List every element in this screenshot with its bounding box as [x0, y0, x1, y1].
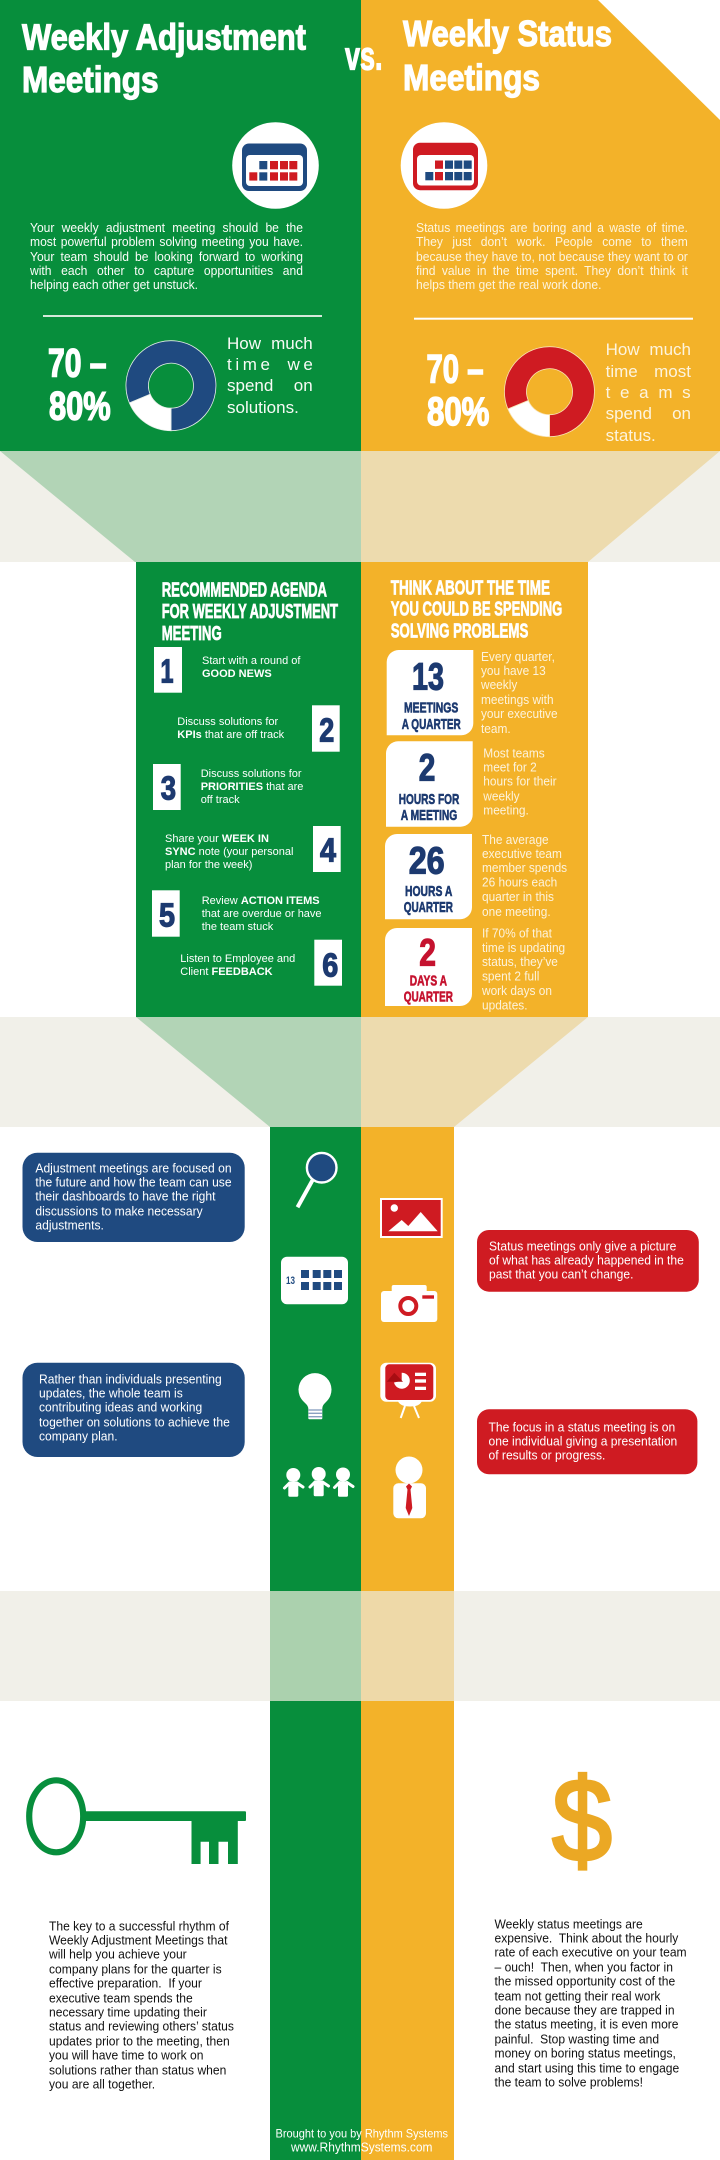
stat: 70 to 80 percent adjustment: 80%	[49, 384, 111, 428]
agenda item 2: KPIs that are off track	[177, 729, 284, 741]
description: 2 hours: Most teams	[483, 746, 545, 760]
card: 13 meetings a quarter: MEETINGS	[404, 700, 458, 717]
card: 2 hours for a meeting: 2	[419, 748, 435, 790]
description: 26 hours: 26 hours each	[482, 875, 557, 890]
description: 26 hours: one meeting.	[482, 905, 551, 919]
description: 13 meetings: you have 13	[481, 664, 546, 678]
callout: status meetings picture of the past: Status meetings only give a picture	[489, 1239, 676, 1254]
versus label: vs.	[345, 34, 382, 78]
text block: how much time we spend on solutions: solutions.	[227, 398, 299, 417]
agenda item 3	[153, 764, 303, 810]
agenda item 5	[152, 890, 322, 937]
description: 2 days: updates.	[482, 998, 528, 1013]
callout: adjustment meetings focus on future: their dashboards to have the right	[35, 1189, 216, 1204]
text block: status meeting intro: Status meetings are boring and a waste of time.	[416, 220, 688, 235]
text block: status meeting intro: helps them get the real work done.	[416, 277, 601, 292]
card: 2 days a quarter: 2	[419, 932, 436, 974]
description: 2 days: work days on	[481, 984, 552, 998]
card: 2 days a quarter: QUARTER	[404, 989, 453, 1006]
text block: adjustment meeting intro: helping each other get unstuck.	[30, 277, 198, 292]
text block: status meeting intro: find value in the time spent. They don’t think it	[416, 263, 688, 278]
icon: calendar with 13 weeks	[281, 1257, 348, 1304]
description: 2 hours: meet for 2	[483, 760, 537, 775]
description: 13 meetings: weekly	[480, 678, 518, 692]
agenda item 5: 5	[159, 897, 175, 934]
stat: 70 to 80 percent adjustment: 70 –	[48, 342, 106, 386]
card: 13 meetings a quarter	[387, 650, 473, 735]
description: 26 hours: member spends	[482, 861, 567, 875]
description: 13 meetings: meetings with	[481, 693, 554, 707]
text block: key to successful adjustment meetings: The key to a successful rhythm of	[49, 1919, 229, 1934]
text block: adjustment meeting intro: Your team should be looking forward to working	[30, 249, 303, 264]
description: 2 days: spent 2 full	[482, 969, 539, 984]
panel: top adjustment meetings background	[0, 0, 361, 451]
text block: key to successful adjustment meetings: status and reviewing others’ status	[49, 2019, 234, 2034]
icon: presentation board	[380, 1363, 436, 1418]
callout: status meetings picture of the past: past that you can’t change.	[489, 1267, 633, 1282]
callout: whole team contributes: updates, the whole team is	[39, 1386, 183, 1401]
heading: recommended agenda	[162, 579, 338, 645]
callout: focus on one individual: The focus in a status meeting is on	[488, 1420, 675, 1435]
card: 13 meetings a quarter: A QUARTER	[402, 716, 461, 733]
agenda item 1: 1	[160, 653, 174, 690]
icon: person with tie	[393, 1456, 426, 1518]
agenda item 2	[177, 705, 340, 752]
text block: status meetings are expensive: – ouch! Then, when you factor in	[494, 1960, 673, 1975]
callout: adjustment meetings focus on future: discussions to make necessary	[35, 1204, 203, 1219]
text block: status meetings are expensive: rate of each executive on your team	[494, 1945, 687, 1960]
central comparison strip	[270, 1127, 454, 2160]
card: 2 hours for a meeting: HOURS FOR	[399, 791, 459, 808]
callout: adjustment meetings focus on future	[22, 1153, 245, 1242]
heading: recommended agenda: MEETING	[162, 622, 222, 645]
callout: status meetings picture of the past	[477, 1230, 699, 1292]
chart: blue donut	[126, 341, 216, 431]
title: weekly adjustment meetings	[22, 16, 306, 100]
text block: how much time most teams spend on status: spend on	[606, 404, 691, 423]
callout: whole team contributes: contributing ideas and working	[39, 1400, 202, 1415]
text block: how much time we spend on solutions: time we	[227, 355, 316, 374]
description: 2 days: status, they’ve	[482, 955, 558, 969]
card: 2 hours for a meeting: A MEETING	[401, 807, 457, 824]
card: 2 days a quarter: DAYS A	[410, 973, 447, 990]
footer credit	[276, 2127, 448, 2154]
agenda item 1: GOOD NEWS	[202, 668, 272, 680]
text block: status meetings are expensive: the missed opportunity cost of the	[494, 1974, 675, 1989]
callout: status meetings picture of the past: of what has already happened in the	[489, 1253, 684, 1268]
text block: status meetings are expensive: team not getting their real work	[494, 1989, 661, 2004]
agenda item 6: Client FEEDBACK	[180, 966, 273, 978]
agenda item 4	[165, 826, 341, 872]
text block: key to successful adjustment meetings: necessary time updating their	[49, 2005, 207, 2020]
callout: adjustment meetings focus on future: adjustments.	[35, 1218, 104, 1233]
text block: status meetings are expensive: done because they are trapped in	[494, 2003, 675, 2018]
icon: red calendar in circle	[401, 122, 487, 209]
icon: blue calendar in circle	[232, 122, 319, 209]
agenda item 3: Discuss solutions for	[201, 768, 302, 780]
agenda item 2: Discuss solutions for	[177, 716, 279, 728]
heading: recommended agenda: RECOMMENDED AGENDA	[162, 579, 327, 602]
text block: status meetings are expensive: money on boring status meetings,	[494, 2046, 676, 2061]
heading: think about the time: THINK ABOUT THE TIME	[391, 577, 550, 600]
text block: key to successful adjustment meetings: effective preparation. If your	[49, 1976, 202, 1991]
footer credit: www.RhythmSystems.com	[290, 2139, 432, 2154]
text block: status meetings are expensive: painful. Stop wasting time and	[494, 2032, 659, 2047]
title: weekly adjustment meetings: Weekly Adjustment	[22, 16, 306, 57]
callout: focus on one individual: of results or progress.	[488, 1448, 605, 1463]
description: 2 hours: weekly	[482, 789, 520, 804]
stat: 70 to 80 percent status: 80%	[427, 390, 489, 434]
callout: whole team contributes: company plan.	[39, 1429, 118, 1444]
callout: adjustment meetings focus on future: Adjustment meetings are focused on	[35, 1161, 232, 1176]
description: 2 days: time is updating	[482, 941, 565, 955]
panel: think about the time	[361, 562, 588, 1017]
callout: whole team contributes	[22, 1363, 245, 1457]
agenda item 5: that are overdue or have	[202, 908, 322, 920]
card: 13 meetings a quarter: 13	[412, 656, 444, 698]
card: 2 hours for a meeting	[386, 741, 473, 827]
description: 26 hours: quarter in this	[482, 890, 554, 904]
description: 26 hours: executive team	[482, 847, 562, 861]
stat: 70 to 80 percent adjustment	[48, 342, 111, 428]
title: weekly adjustment meetings: Meetings	[22, 59, 158, 100]
stat: 70 to 80 percent status: 70 –	[426, 348, 484, 392]
text block: status meetings are expensive: and start using this time to engage	[494, 2061, 679, 2076]
callout: whole team contributes: Rather than individuals presenting	[39, 1372, 222, 1387]
card: 26 hours a quarter: HOURS A	[405, 883, 452, 900]
card: 26 hours a quarter	[385, 834, 472, 919]
description: 26 hours: The average	[482, 833, 549, 847]
agenda item 3: off track	[201, 794, 240, 806]
text block: adjustment meeting intro: Your weekly adjustment meeting should be the	[30, 220, 303, 235]
text block: key to successful adjustment meetings: you are all together.	[49, 2077, 155, 2092]
card: 26 hours a quarter: 26	[409, 840, 445, 882]
text block: key to successful adjustment meetings: Weekly Adjustment Meetings that	[49, 1933, 228, 1948]
description: 2 days: If 70% of that	[482, 926, 553, 941]
title: weekly status meetings	[403, 13, 612, 98]
description: 13 meetings: team.	[481, 722, 511, 736]
text block: how much time most teams spend on status: How much	[606, 340, 691, 359]
title: weekly status meetings: Meetings	[403, 57, 540, 98]
icon: picture	[380, 1198, 443, 1238]
callout: focus on one individual	[477, 1409, 697, 1474]
callout: focus on one individual: one individual giving a presentation	[488, 1434, 677, 1449]
agenda item 4: Share your WEEK IN	[165, 833, 269, 845]
text block: how much time we spend on solutions	[227, 334, 316, 417]
agenda item 1	[154, 647, 301, 693]
agenda item 3: PRIORITIES that are	[201, 781, 303, 793]
callout: whole team contributes: together on solutions to achieve the	[39, 1415, 230, 1430]
text block: adjustment meeting intro	[30, 220, 303, 292]
agenda item 6: 6	[322, 946, 338, 983]
icon: magnifying glass	[298, 1153, 337, 1206]
icon: calendar with 13 weeks: 13	[286, 1275, 295, 1287]
text block: key to successful adjustment meetings: company plans for the quarter is	[49, 1962, 222, 1977]
text block: status meeting intro: They just don’t work. People come to them	[416, 234, 688, 249]
description: 2 hours: meeting.	[483, 803, 529, 818]
description: 13 meetings: your executive	[481, 707, 558, 721]
heading: think about the time: YOU COULD BE SPENDING	[391, 598, 562, 621]
agenda item 6: Listen to Employee and	[180, 953, 295, 965]
agenda item 3: 3	[161, 769, 176, 806]
title: weekly status meetings: Weekly Status	[403, 13, 612, 54]
text block: key to successful adjustment meetings: updates prior to the meeting, then	[49, 2034, 230, 2049]
card: 26 hours a quarter: QUARTER	[404, 899, 453, 916]
description: 2 hours: hours for their	[483, 774, 557, 789]
text block: status meetings are expensive: expensive. Think about the hourly	[494, 1931, 679, 1946]
text block: status meetings are expensive: the team to solve problems!	[494, 2075, 643, 2090]
text block: status meetings are expensive: Weekly status meetings are	[494, 1917, 643, 1932]
icon: dollar sign: $	[552, 1755, 612, 1887]
text block: how much time we spend on solutions: How much	[227, 334, 313, 353]
text block: adjustment meeting intro: with each other to capture opportunities and	[30, 263, 303, 278]
text block: how much time most teams spend on status: time most	[606, 362, 691, 381]
callout: adjustment meetings focus on future: the future and how the team can use	[35, 1175, 232, 1190]
agenda item 5: Review ACTION ITEMS	[202, 895, 320, 907]
stat: 70 to 80 percent status	[426, 348, 489, 434]
text block: how much time most teams spend on status: teams	[606, 383, 700, 402]
text block: how much time most teams spend on status: status.	[606, 426, 656, 445]
text block: how much time we spend on solutions: spend on	[227, 376, 313, 395]
heading: recommended agenda: FOR WEEKLY ADJUSTMENT	[162, 600, 338, 623]
icon: team of three people	[284, 1467, 353, 1497]
chart: red donut	[504, 347, 594, 437]
text block: status meeting intro: because they have to, not because they want to or	[416, 249, 688, 264]
text block: adjustment meeting intro: most powerful problem solving meeting you have.	[30, 234, 303, 249]
text block: key to successful adjustment meetings: solutions rather than status when	[49, 2063, 226, 2078]
text block: key to successful adjustment meetings: you will have time to work on	[49, 2048, 203, 2063]
text block: status meetings are expensive: the status meeting, it is even more	[494, 2017, 679, 2032]
panel: top status meetings background	[361, 0, 720, 451]
heading: think about the time: SOLVING PROBLEMS	[391, 620, 528, 643]
heading: think about the time	[391, 577, 562, 643]
text block: key to successful adjustment meetings: will help you achieve your	[48, 1947, 187, 1962]
agenda item 4: 4	[320, 832, 337, 869]
icon: camera	[381, 1285, 437, 1322]
agenda item 4: plan for the week)	[165, 859, 252, 871]
agenda item 2: 2	[319, 712, 334, 749]
text block: how much time most teams spend on status	[606, 340, 700, 445]
text block: key to successful adjustment meetings: executive team spends the	[49, 1991, 193, 2006]
agenda item 5: the team stuck	[202, 921, 274, 933]
text block: status meeting intro	[416, 220, 688, 292]
panel: recommended agenda	[136, 562, 361, 1017]
card: 2 days a quarter	[385, 928, 472, 1006]
agenda item 6	[180, 940, 342, 986]
footer credit: Brought to you by Rhythm Systems	[276, 2127, 448, 2141]
description: 13 meetings: Every quarter,	[481, 650, 555, 664]
icon: green key	[29, 1780, 246, 1864]
agenda item 1: Start with a round of	[202, 655, 301, 667]
agenda item 4: SYNC note (your personal	[165, 846, 293, 858]
icon: light bulb	[298, 1373, 332, 1419]
